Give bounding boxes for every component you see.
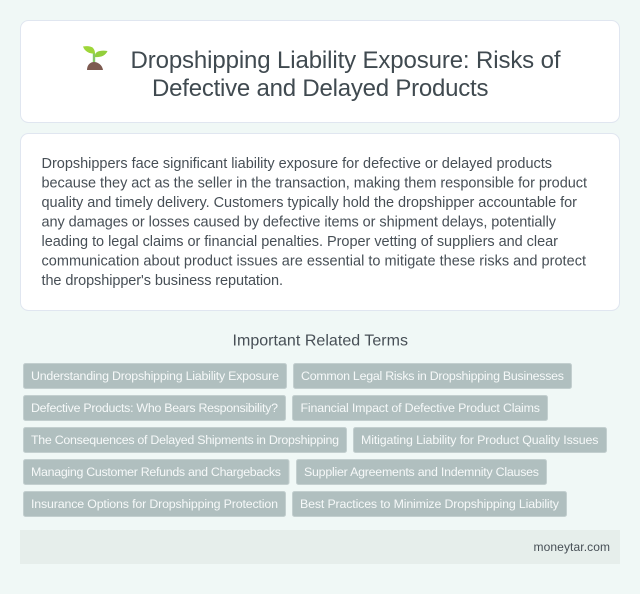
tag: Best Practices to Minimize Dropshipping Liability [300, 497, 560, 511]
text block: description: because they act as the seller in the transaction, making them responsible for product [42, 176, 587, 192]
tag [354, 428, 606, 452]
tag: Understanding Dropshipping Liability Exposure [31, 369, 279, 383]
tag: Managing Customer Refunds and Chargebacks [31, 465, 281, 479]
tag: Common Legal Risks in Dropshipping Businesses [301, 369, 564, 383]
heading: title: Defective and Delayed Products [152, 75, 488, 102]
heading: Important Related Terms: Important Related Terms [232, 332, 408, 350]
text block: description: leading to legal claims or financial penalties. Proper vetting of suppliers and clear [42, 234, 558, 250]
tag [292, 396, 548, 420]
tag: Insurance Options for Dropshipping Protection [31, 497, 278, 511]
tag: The Consequences of Delayed Shipments in Dropshipping [31, 433, 339, 447]
tag: Financial Impact of Defective Product Claims [300, 401, 540, 415]
footer [20, 530, 620, 564]
tag list: related terms [24, 364, 606, 516]
text block: description: quality and timely delivery. Customers typically hold the dropshipper accountable for [42, 195, 577, 211]
tag [24, 460, 289, 484]
text block: description: any damages or losses caused by defective items or shipment delays, potentially [42, 214, 557, 230]
tag: Mitigating Liability for Product Quality Issues [361, 433, 598, 447]
tag [292, 492, 566, 516]
tag: Supplier Agreements and Indemnity Clauses [304, 465, 539, 479]
text block: description: communication about product issues are essential to mitigate these risks and protect [42, 254, 586, 270]
text block: description: the dropshipper's business reputation. [42, 273, 283, 289]
panel: description [20, 134, 620, 310]
tag: Defective Products: Who Bears Responsibility? [31, 401, 278, 415]
panel: title card [20, 20, 620, 122]
tag [24, 364, 286, 388]
text block: description [42, 156, 587, 289]
tag [24, 492, 286, 516]
footer text: moneytar.com: moneytar.com [534, 540, 610, 554]
tag [294, 364, 572, 388]
tag [24, 396, 286, 420]
text block: description: Dropshippers face significant liability exposure for defective or delayed products [42, 156, 552, 172]
icon: sprout [83, 46, 108, 70]
heading: title [130, 47, 561, 102]
heading: title: Dropshipping Liability Exposure: Risks of [130, 47, 561, 74]
tag [296, 460, 546, 484]
tag [24, 428, 346, 452]
